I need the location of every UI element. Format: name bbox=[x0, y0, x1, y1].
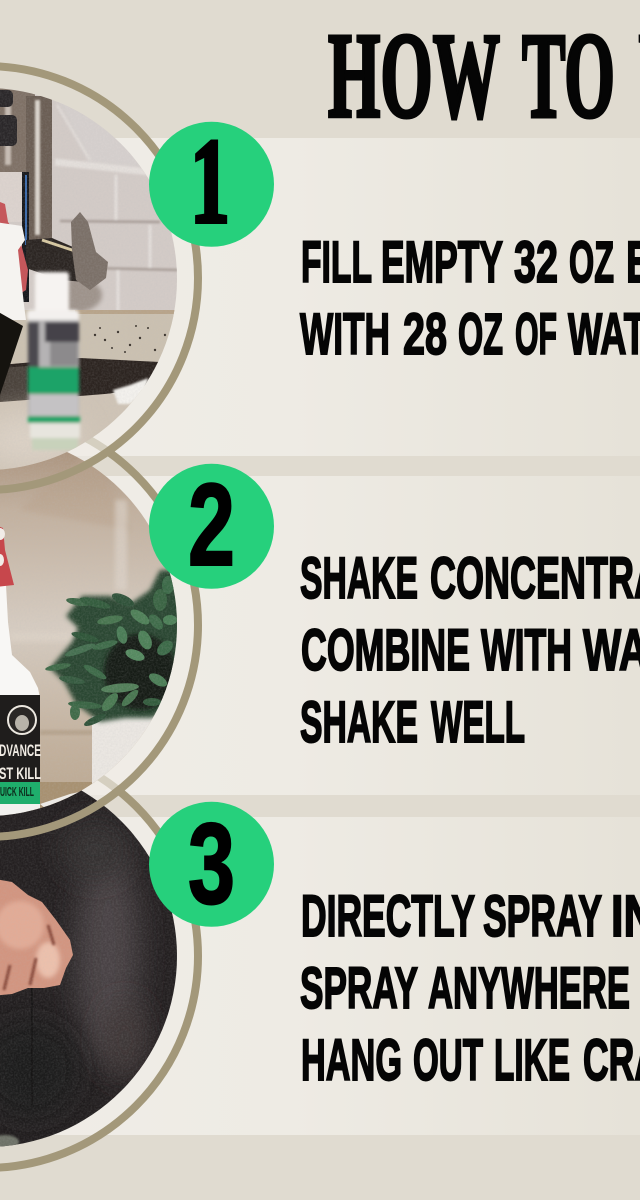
text: step 2 instructions: COMBINE bbox=[301, 618, 470, 683]
faucet handle bbox=[71, 212, 108, 290]
upper faucet and sprayer bbox=[0, 85, 35, 173]
fist bbox=[0, 878, 73, 996]
bottle bbox=[0, 526, 78, 816]
nozzle bbox=[0, 525, 14, 587]
panel: step 1 background bbox=[0, 138, 640, 456]
small bottle bbox=[27, 272, 80, 450]
badge: step 1 bbox=[149, 114, 274, 249]
text: step 1 instructions: WITH bbox=[300, 302, 390, 367]
ring: step 2 bbox=[0, 413, 198, 837]
badge: step 1: 1 bbox=[190, 114, 230, 249]
text: step 1 instructions: OF bbox=[515, 302, 557, 367]
bottle: ST KILL bbox=[0, 764, 41, 783]
large white bottle bbox=[0, 222, 26, 320]
text: step 3 instructions: HANG bbox=[301, 1028, 402, 1093]
text: step 2 instructions: WELL bbox=[431, 690, 525, 755]
text: step 2 instructions: WITH bbox=[481, 618, 572, 683]
counter bbox=[10, 310, 174, 370]
plant pot bbox=[92, 711, 156, 784]
inner disk: step 2 bbox=[89, 775, 118, 800]
ring: step 3 bbox=[0, 744, 198, 1168]
text: step 1 instructions: EMPTY bbox=[381, 230, 503, 295]
black label bbox=[0, 310, 23, 395]
shadow under faucet bbox=[68, 280, 104, 310]
pink hand bbox=[0, 200, 28, 295]
ring: step 1 bbox=[0, 66, 198, 490]
badge: step 3: 3 bbox=[188, 800, 235, 928]
title: HOW bbox=[328, 8, 500, 144]
text: step 1 instructions bbox=[300, 230, 640, 367]
faucet base bbox=[26, 238, 78, 282]
text: step 2 instructions: SHAKE bbox=[300, 546, 418, 611]
bottle: UICK KILL bbox=[0, 784, 34, 799]
sink bbox=[9, 358, 158, 400]
photo: step 1, faucet and bottles bbox=[0, 88, 177, 470]
text: step 3 instructions: DIRECTLY bbox=[301, 884, 475, 949]
panel: step 3 background bbox=[0, 817, 640, 1135]
text: step 3 instructions bbox=[300, 884, 640, 1093]
white blob bbox=[113, 378, 148, 404]
text: step 2 instructions bbox=[300, 546, 640, 755]
text: step 1 instructions: FILL bbox=[301, 230, 372, 295]
inner disk: step 1 bbox=[76, 437, 108, 461]
tile grout bbox=[55, 105, 180, 312]
bottle label bbox=[0, 695, 40, 785]
text: step 3 instructions: OUT bbox=[413, 1028, 483, 1093]
faucet stem bbox=[26, 96, 52, 246]
text: step 1 instructions: OZ bbox=[458, 302, 503, 367]
text: step 1 instructions: 28 bbox=[403, 302, 447, 367]
badge: step 2: 2 bbox=[188, 459, 235, 590]
photo: step 3, fist on dark shirt bbox=[0, 790, 177, 1146]
badge: step 3 bbox=[149, 800, 274, 928]
badge: step 2 bbox=[149, 459, 274, 590]
plant bbox=[45, 570, 185, 728]
panel: step 2 background bbox=[0, 476, 640, 795]
foreground counter bbox=[0, 390, 142, 470]
text: step 1 instructions: 32 bbox=[514, 230, 558, 295]
text: step 3 instructions: SPRAY bbox=[300, 956, 418, 1021]
bottle: DVANCE bbox=[0, 741, 41, 760]
photo: step 2, concentrate bottle and plant bbox=[0, 452, 177, 816]
text: step 2 instructions: SHAKE bbox=[300, 690, 418, 755]
text: step 3 instructions: LIKE bbox=[494, 1028, 570, 1093]
